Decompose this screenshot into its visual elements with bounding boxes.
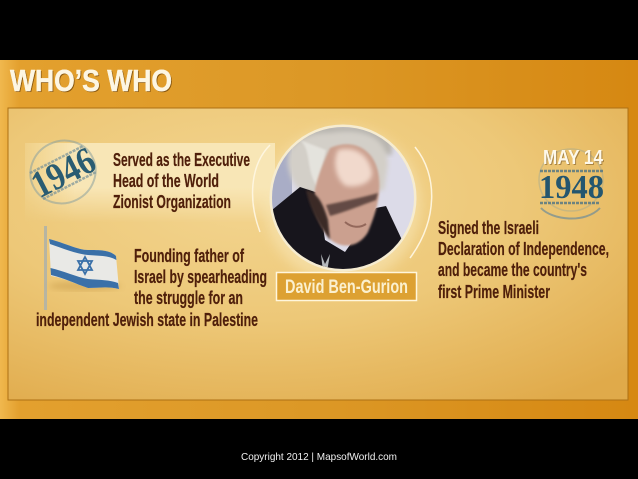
stamp: May 14 1948	[539, 147, 605, 219]
bottom black bar	[0, 419, 638, 479]
stamp: 1946: 1946	[25, 139, 102, 207]
title: WHO’S WHO	[10, 63, 172, 98]
text: declaration: first Prime Minister	[438, 282, 550, 302]
text: executive head	[113, 150, 250, 212]
top black bar	[0, 0, 638, 60]
stamp: May 14 1948: MAY 14	[543, 147, 604, 169]
text: founding father: the struggle for an	[134, 288, 243, 308]
glow behind photo	[265, 127, 421, 283]
copyright: Copyright 2012 | MapsofWorld.com	[241, 451, 397, 463]
text: executive head: Head of the World	[113, 171, 219, 191]
text: declaration	[438, 218, 609, 302]
text: founding father: Founding father of	[134, 246, 245, 266]
arc left	[253, 145, 270, 232]
icon: Israeli flag	[44, 226, 121, 310]
name label	[276, 272, 416, 300]
stamp: May 14 1948: 1948	[539, 169, 604, 206]
stamp: May 14 1948: MAY 14	[544, 148, 605, 170]
arc right	[410, 147, 432, 258]
gold background	[0, 60, 638, 419]
name label: David Ben-Gurion	[285, 277, 408, 298]
text: founding father: Israel by spearheading	[134, 267, 267, 287]
text: founding father: independent Jewish state in Palestine	[36, 310, 258, 330]
title: WHO’S WHO	[11, 64, 173, 99]
portrait: David Ben-Gurion	[270, 124, 416, 272]
text: executive head: Served as the Executive	[113, 150, 250, 170]
text: founding father	[36, 246, 267, 330]
text: declaration: Signed the Israeli	[438, 218, 539, 238]
panel: content	[8, 108, 628, 400]
light band behind top left text	[25, 143, 275, 223]
text: executive head: Zionist Organization	[113, 192, 231, 212]
